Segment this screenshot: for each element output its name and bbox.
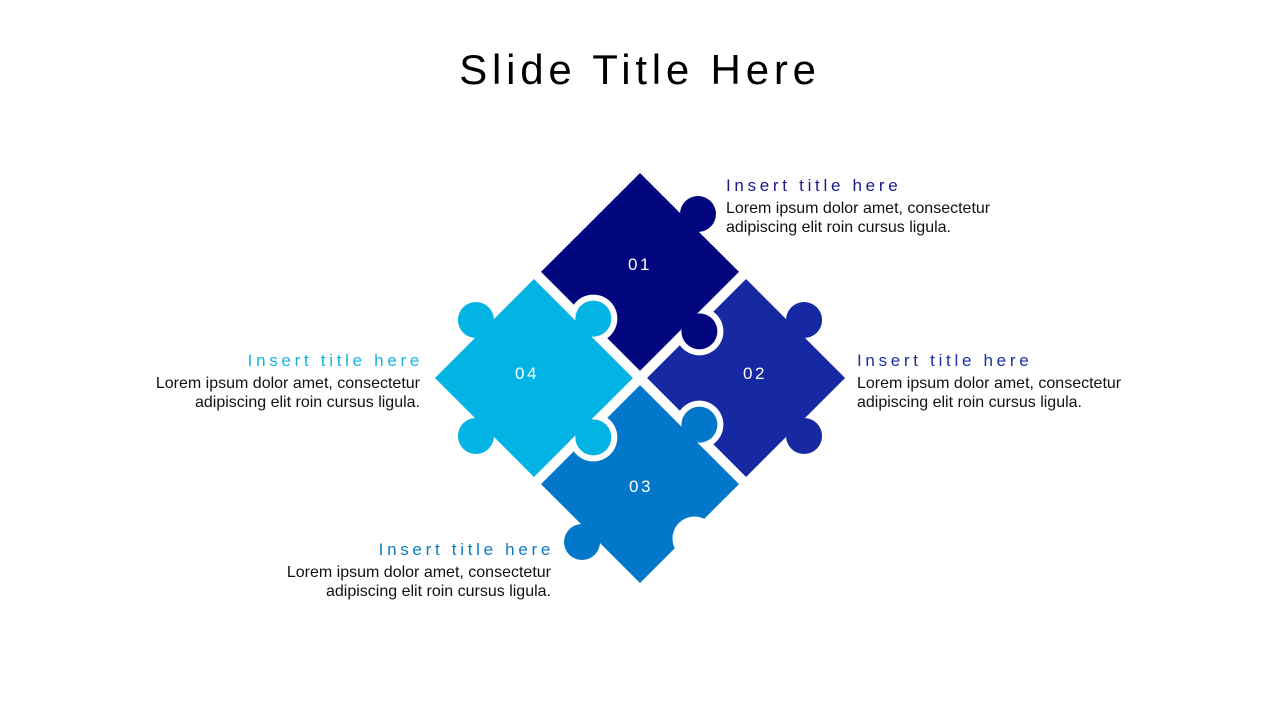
text block 03 xyxy=(287,540,554,600)
number labels: 04 xyxy=(515,364,539,383)
piece 01 xyxy=(541,152,760,371)
text block 03: Insert title here xyxy=(379,540,554,559)
text block 03: Lorem ipsum dolor amet, consectetur xyxy=(287,564,551,581)
tab 01 into 02 xyxy=(676,308,724,356)
text block 02: adipiscing elit roin cursus ligula. xyxy=(857,394,1082,411)
text block 04: adipiscing elit roin cursus ligula. xyxy=(195,394,420,411)
text block 02 xyxy=(857,351,1121,411)
text block 04: Lorem ipsum dolor amet, consectetur xyxy=(156,375,420,392)
title: Slide Title Here xyxy=(459,46,821,93)
number labels: 02 xyxy=(743,364,767,383)
text block 04 xyxy=(156,351,423,411)
piece 04 xyxy=(393,258,633,498)
text block 02: Insert title here xyxy=(857,351,1032,370)
tab 03 into 02 xyxy=(676,400,724,448)
tab 04 into 03 xyxy=(570,414,618,462)
piece 03 xyxy=(520,385,739,604)
notch: piece 03 outer xyxy=(663,507,726,570)
text block 01: Insert title here xyxy=(726,176,901,195)
text block 03: adipiscing elit roin cursus ligula. xyxy=(326,583,551,600)
piece 02 xyxy=(647,258,887,498)
number labels: 03 xyxy=(629,477,653,496)
text block 01: Lorem ipsum dolor amet, consectetur xyxy=(726,200,990,217)
tab 04 into 01 xyxy=(570,294,618,342)
puzzle diagram xyxy=(435,173,845,583)
number labels xyxy=(515,255,767,496)
number labels: 01 xyxy=(628,255,652,274)
text block 02: Lorem ipsum dolor amet, consectetur xyxy=(857,375,1121,392)
text block 01: adipiscing elit roin cursus ligula. xyxy=(726,219,951,236)
text block 04: Insert title here xyxy=(248,351,423,370)
text block 01 xyxy=(726,176,990,236)
